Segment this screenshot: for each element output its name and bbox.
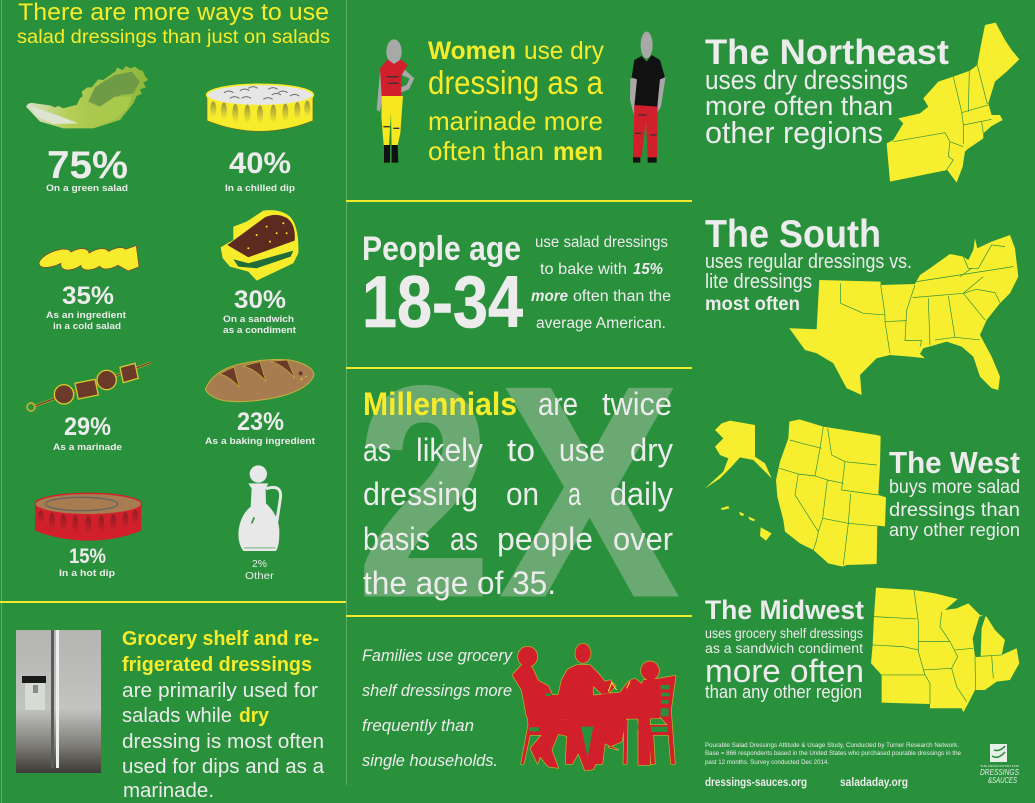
panel: uses for salad dressings [17, 0, 330, 582]
text: millennials are twice as likely: are [538, 386, 578, 422]
map: south [789, 235, 1018, 395]
text: source note: Base = 866 respondents based in the United States who purchased pourable dressings in the [705, 750, 961, 757]
panel: grocery shelf vs dry dressings [16, 628, 325, 802]
icon: woman figure [377, 39, 414, 163]
text: millennials are twice as likely: on [506, 476, 539, 512]
text: bake with 15% more: more [531, 288, 568, 305]
stat: 40 percent: 40% [229, 147, 291, 180]
icon: oil cruet [238, 465, 281, 551]
text: millennials are twice as likely: Millennials [363, 386, 517, 422]
text: women use dry dressing: use dry [524, 37, 604, 65]
text: grocery shelf dressings: dry [239, 705, 270, 727]
watermark: 2X: 2 [358, 326, 490, 657]
stat: 23 percent: As a baking ingredient [205, 436, 316, 447]
panel: millennials 2X [358, 326, 678, 657]
text: bake with 15% more: often than the [573, 288, 671, 305]
text: uses dry dressings: uses dry dressings [705, 65, 908, 95]
stat: 2 percent: Other [245, 571, 275, 582]
text: bake with 15% more: average American. [536, 315, 666, 332]
text: grocery shelf dressings: used for dips and as a [122, 756, 325, 778]
text: uses regular dressings: most often [705, 294, 800, 315]
text: millennials are twice as likely: use [559, 432, 605, 468]
stat: 2 percent: 2% [252, 559, 267, 570]
stat: 29 percent [53, 413, 122, 453]
text: millennials are twice as likely: basis [363, 521, 430, 557]
panel: the midwest [705, 588, 1019, 712]
logo: association for dressings and sauces: &SAUCES [988, 776, 1018, 785]
stat: 75 percent: On a green salad [46, 183, 128, 194]
text: families use grocery shelf dressings: single households. [362, 751, 498, 770]
text: millennials are twice as likely: twice [602, 386, 672, 422]
panel: the west [705, 419, 1020, 567]
logo: association for dressings and sauces: DRESSINGS [980, 768, 1020, 777]
text: bake with 15% more: to bake with [540, 261, 627, 278]
text: uses dry dressings: other regions [705, 115, 883, 150]
text: women use dry dressing: dressing as a [428, 64, 604, 101]
link: dressings-sauces.org: dressings-sauces.org [705, 775, 807, 789]
link: saladaday.org: saladaday.org [840, 775, 908, 789]
text: uses dry dressings [705, 65, 908, 150]
stat: 30 percent: 30% [234, 286, 286, 314]
text: millennials are twice as likely: over [613, 521, 673, 557]
icon: man figure [630, 32, 666, 163]
text: buys more salad dressings: dressings than [889, 500, 1020, 521]
stat: 40 percent: In a chilled dip [225, 183, 295, 194]
heading [362, 230, 523, 343]
stat: 2 percent [245, 559, 275, 582]
footer [705, 742, 1020, 789]
text: women use dry dressing: marinade more [428, 106, 603, 136]
text: buys more salad dressings: any other region [889, 520, 1020, 540]
text: uses grocery shelf dressings: more often [705, 653, 864, 689]
text: uses grocery shelf dressings [705, 625, 864, 702]
text: source note: past 12 months. Survey conducted Dec 2014. [705, 759, 829, 766]
stat: 35 percent [46, 282, 127, 332]
text: millennials are twice as likely [363, 386, 673, 601]
text: millennials are twice as likely: as [363, 432, 391, 468]
text: uses dry dressings: more often than [705, 91, 893, 121]
icon: refrigerator [16, 630, 101, 773]
text: women use dry dressing [428, 37, 604, 166]
stat: 75 percent: 75% [47, 144, 128, 187]
map: west states [776, 419, 886, 567]
panel: families [362, 644, 676, 771]
text: millennials are twice as likely: people [497, 521, 593, 557]
icon: sandwich [221, 210, 298, 281]
stat: 23 percent [205, 408, 316, 447]
stat: 23 percent: 23% [237, 408, 284, 436]
text: grocery shelf dressings [122, 628, 325, 802]
text: millennials are twice as likely: the age of 35. [363, 565, 556, 601]
map: midwest [871, 588, 1019, 712]
text: grocery shelf dressings: frigerated dressings [122, 654, 312, 676]
text: millennials are twice as likely: dry [630, 432, 673, 468]
stat: 29 percent: As a marinade [53, 442, 122, 453]
panel: women vs men [377, 32, 666, 166]
text: source note: Pourable Salad Dressings Attitude & Usage Study, Conducted by Turner Research Network. [705, 742, 959, 749]
stat: 15 percent: In a hot dip [59, 568, 115, 579]
text: grocery shelf dressings: are primarily used for [122, 680, 318, 702]
title [17, 0, 330, 48]
stat: 30 percent: On a sandwich [223, 314, 294, 325]
stat: 15 percent: 15% [69, 545, 106, 568]
text: millennials are twice as likely: daily [610, 476, 673, 512]
text: women use dry dressing: Women [428, 37, 516, 65]
text: bake with 15% more [531, 234, 671, 332]
text: women use dry dressing: often than [428, 136, 544, 166]
icon: chilled dip [207, 84, 313, 131]
heading: 18-34 [362, 262, 523, 343]
text: uses grocery shelf dressings: uses grocery shelf dressings [705, 625, 863, 641]
heading: the midwest: The Midwest [705, 595, 864, 625]
text: families use grocery shelf dressings: Families use grocery [362, 646, 513, 665]
icon: lettuce leaf [26, 66, 148, 128]
map: alaska and hawaii [705, 421, 772, 541]
icon: rotini pasta [37, 244, 139, 274]
text: uses grocery shelf dressings: than any other region [705, 682, 862, 702]
icon: hot dip [35, 493, 142, 541]
text: families use grocery shelf dressings: frequently than [362, 716, 474, 735]
panel: the northeast [705, 23, 1019, 183]
stat: 40 percent [225, 147, 295, 194]
stat: 30 percent: as a condiment [223, 325, 297, 336]
text: uses regular dressings [705, 251, 912, 315]
text: uses regular dressings: uses regular dressings vs. [705, 251, 912, 273]
text: buys more salad dressings [889, 477, 1020, 540]
icon: bread loaf [205, 359, 314, 402]
text: millennials are twice as likely: as [450, 521, 478, 557]
watermark: 2X [358, 326, 678, 657]
text: millennials are twice as likely: a [568, 476, 581, 512]
text: grocery shelf dressings: salads while [122, 705, 232, 727]
text: bake with 15% more: 15% [633, 261, 663, 278]
panel: the south [705, 213, 1018, 395]
heading: People age [362, 230, 521, 268]
heading: the northeast: The Northeast [705, 33, 949, 72]
heading: the west: The West [889, 445, 1020, 480]
stat: 29 percent: 29% [64, 413, 111, 441]
text: buys more salad dressings: buys more salad [889, 477, 1020, 498]
text: women use dry dressing: men [553, 136, 603, 166]
text: grocery shelf dressings: Grocery shelf and re- [122, 628, 319, 650]
watermark: 2X: X [502, 326, 678, 657]
text: families use grocery shelf dressings [362, 646, 513, 770]
text: bake with 15% more: use salad dressings [535, 234, 668, 251]
stat: 30 percent [223, 286, 297, 336]
panel: people age 18-34 [362, 230, 671, 343]
text: source note [705, 742, 961, 766]
icon: family at table [512, 644, 676, 771]
stat: 35 percent: As an ingredient [46, 310, 127, 321]
title: salad dressings than just on salads [17, 27, 330, 48]
text: millennials are twice as likely: dressing [363, 476, 478, 512]
heading: the south: The South [705, 213, 881, 256]
text: families use grocery shelf dressings: shelf dressings more [362, 681, 512, 700]
logo: association for dressings and sauces: THE ASSOCIATION FOR [980, 764, 1020, 768]
text: uses regular dressings: lite dressings [705, 271, 812, 293]
stat: 15 percent [59, 545, 115, 579]
icon: kabob skewer [27, 363, 151, 411]
text: millennials are twice as likely: likely [416, 432, 483, 468]
text: grocery shelf dressings: marinade. [123, 780, 214, 802]
text: uses grocery shelf dressings: as a sandwich condiment [705, 640, 863, 656]
stat: 35 percent: in a cold salad [53, 321, 121, 332]
map: northeast [887, 23, 1019, 183]
text: grocery shelf dressings: dressing is most often [122, 731, 324, 753]
stat: 35 percent: 35% [62, 282, 114, 310]
logo: association for dressings and sauces [980, 744, 1020, 785]
text: millennials are twice as likely: to [507, 432, 535, 468]
